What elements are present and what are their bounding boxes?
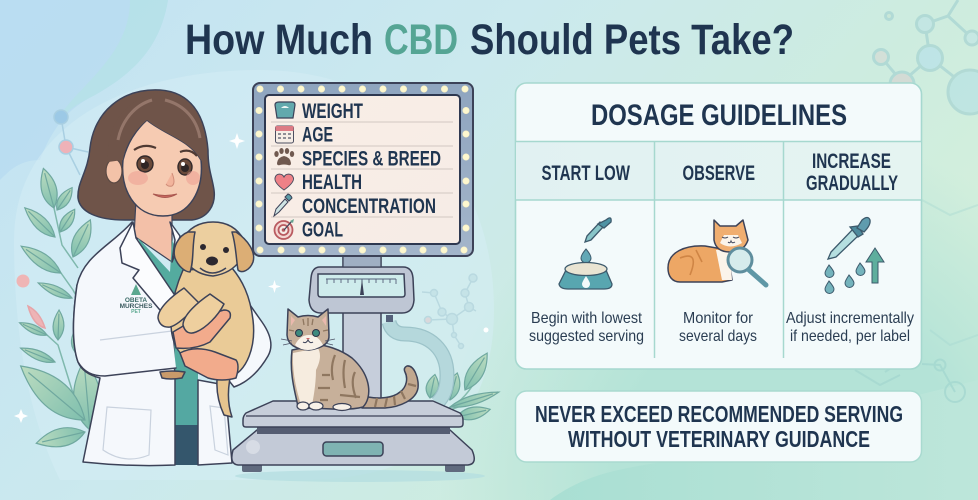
board list: text: GOAL xyxy=(302,218,343,242)
hose xyxy=(386,315,447,403)
sign board xyxy=(253,83,473,267)
vet: brows and eyes xyxy=(134,146,197,175)
increase gradually: description xyxy=(786,310,914,345)
dog: rear foot xyxy=(160,371,185,379)
vet: cheeks xyxy=(128,171,200,185)
vet: lab coat xyxy=(73,222,232,466)
observe: description xyxy=(679,310,757,345)
increase gradually: description: if needed, per label xyxy=(790,328,910,345)
plant: left xyxy=(11,166,103,452)
cat on scale xyxy=(281,309,418,410)
vet: hair back xyxy=(78,90,214,220)
plant: right of scale xyxy=(424,349,500,423)
board: row dividers xyxy=(271,122,453,217)
board: screen xyxy=(265,95,460,244)
vet: logo xyxy=(120,284,153,315)
icon: target xyxy=(274,219,294,239)
observe: description: several days xyxy=(679,328,757,345)
start low: description xyxy=(529,310,644,345)
panel card xyxy=(516,83,922,369)
panel: header band xyxy=(516,142,921,200)
board: frame xyxy=(253,83,473,256)
board list: text: SPECIES & BREED xyxy=(302,148,441,170)
vet: far arm xyxy=(222,288,271,387)
dog: head xyxy=(174,222,254,276)
cat: tail xyxy=(362,366,418,408)
molecule: upper left xyxy=(16,110,88,328)
dog: tail xyxy=(217,378,232,417)
vet: logo: MURCHES xyxy=(120,303,153,310)
scale xyxy=(232,250,474,472)
cat: stripes xyxy=(318,355,416,407)
dog xyxy=(158,222,254,417)
icon: heart xyxy=(275,174,294,190)
start low: description: Begin with lowest xyxy=(531,310,642,327)
increase gradually: heading: INCREASE xyxy=(812,150,891,173)
scale: column xyxy=(343,250,381,402)
sparkles xyxy=(229,133,488,332)
cat: body xyxy=(291,345,369,409)
board list: text: WEIGHT xyxy=(302,100,363,123)
vet: neck xyxy=(134,200,172,262)
board list: text xyxy=(302,100,441,242)
board list: text: CONCENTRATION xyxy=(302,195,436,218)
icon: dropper over bowl xyxy=(559,218,612,289)
vet: collar right xyxy=(170,222,180,262)
vet: scrub strip xyxy=(175,380,198,465)
cat: chest xyxy=(293,348,320,405)
vet: fringe xyxy=(108,92,206,165)
observe: heading: OBSERVE xyxy=(682,162,755,185)
callout: warning xyxy=(516,391,922,462)
vet: scrubs V xyxy=(138,238,198,382)
panel: rules xyxy=(516,142,921,358)
icon: dropper with drops and arrow xyxy=(825,218,884,294)
increase gradually: heading xyxy=(806,150,898,195)
dog: body xyxy=(171,268,254,378)
panel: dosage guidelines xyxy=(516,83,922,369)
title: Should Pets Take? xyxy=(470,16,794,64)
vet: pockets xyxy=(103,406,228,459)
title: How Much xyxy=(185,16,373,64)
vet: nose and mouth xyxy=(153,173,177,198)
scale: dial head xyxy=(309,267,414,313)
board list: text: HEALTH xyxy=(302,171,362,194)
cat: head xyxy=(281,309,335,350)
vet: logo: OBETA xyxy=(125,297,147,304)
veterinarian xyxy=(73,90,271,466)
board: lights xyxy=(256,86,469,253)
vet: logo: PET xyxy=(131,309,141,315)
molecule: behind scale xyxy=(422,274,477,348)
increase gradually: heading: GRADUALLY xyxy=(806,172,898,195)
vet: collar xyxy=(120,222,178,322)
molecule: lower right xyxy=(855,200,978,402)
dog: paws xyxy=(158,288,224,333)
column: observe xyxy=(668,162,766,345)
board: neck xyxy=(343,256,381,267)
icon: dropper xyxy=(274,194,292,216)
increase gradually: description: Adjust incrementally xyxy=(786,310,914,327)
title: CBD xyxy=(384,16,458,64)
dog: upper hand xyxy=(173,310,230,348)
board list: text: AGE xyxy=(302,124,333,146)
column: increase gradually xyxy=(786,150,914,345)
scale: base xyxy=(232,427,474,472)
icon: cat with magnifier xyxy=(668,220,766,285)
icon: weight scale xyxy=(275,102,295,118)
vet: face xyxy=(123,120,201,216)
molecule: top right xyxy=(874,0,978,114)
icon: paw xyxy=(274,148,294,165)
vet: sleeve xyxy=(73,285,176,376)
title xyxy=(185,16,794,64)
icon: calendar xyxy=(276,126,294,143)
dog: lower hand xyxy=(180,349,238,380)
vet: ear xyxy=(106,159,122,183)
column: start low xyxy=(529,162,644,345)
start low: heading: START LOW xyxy=(542,162,630,185)
start low: description: suggested serving xyxy=(529,328,644,345)
callout: warning: WITHOUT VETERINARY GUIDANCE xyxy=(568,426,870,452)
observe: description: Monitor for xyxy=(683,310,754,327)
scale: platform xyxy=(243,401,463,427)
cat: paws xyxy=(297,402,351,410)
heading: dosage guidelines: DOSAGE GUIDELINES xyxy=(591,99,847,132)
